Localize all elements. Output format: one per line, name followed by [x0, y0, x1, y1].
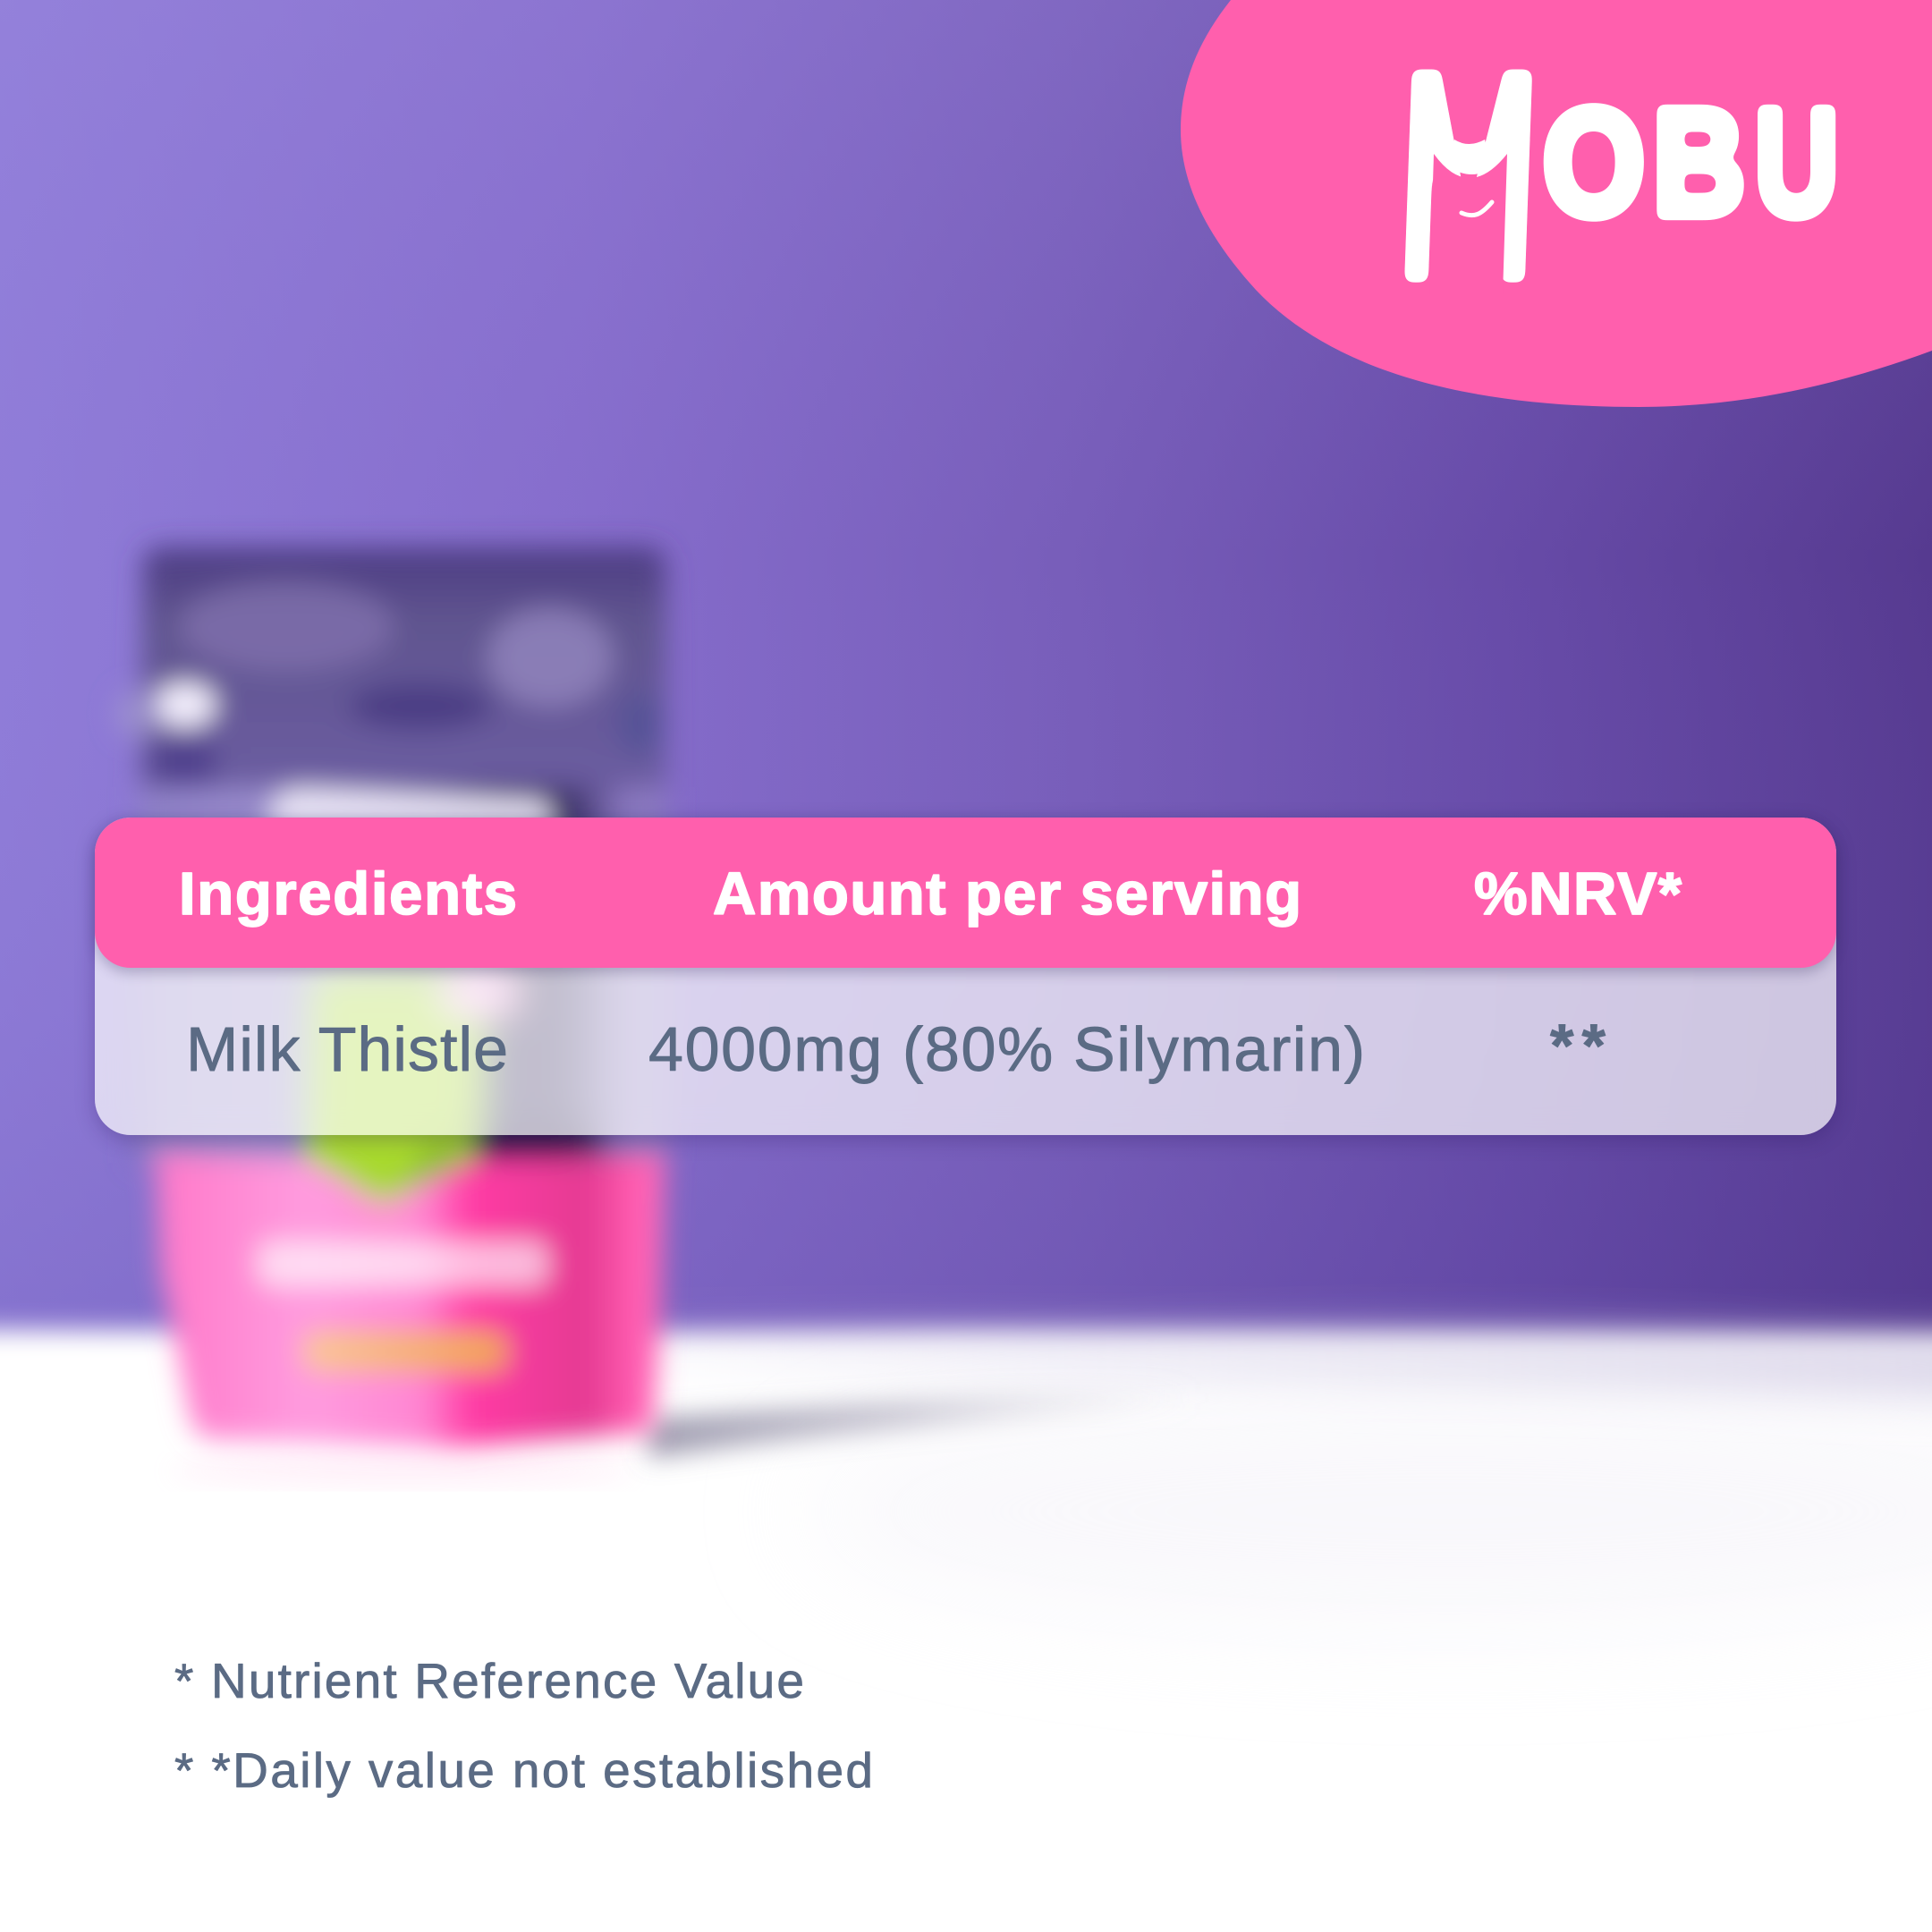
label band [258, 1241, 548, 1286]
header text [179, 860, 1682, 928]
column heading: ingredients: Ingredients [179, 860, 517, 928]
amount: 4000mg (80% Silymarin) [648, 1014, 1365, 1084]
panel: ingredients table [85, 812, 1843, 1150]
NRV value: ** [1550, 1012, 1606, 1080]
reflection below product [170, 1459, 635, 1484]
table header bar [95, 818, 1836, 968]
upper pouch [134, 547, 667, 1163]
logo: MOBU: U [1755, 77, 1838, 247]
orange tag [302, 1331, 508, 1372]
table body row: frosted glass [95, 818, 1836, 1135]
logo: MOBU: M [1394, 18, 1543, 335]
ingredient name: Milk Thistle [186, 1014, 508, 1084]
footnote: nutrient reference value: * Nutrient Reference Value [174, 1653, 804, 1708]
floor [0, 1329, 1932, 1932]
logo: centre join of the M [1447, 140, 1492, 174]
blurred product [115, 547, 667, 1447]
logo: MOBU: O [1543, 77, 1645, 247]
row text [186, 1012, 1606, 1084]
floor haze near horizon [501, 1333, 1932, 1397]
logo: MOBU: B [1653, 78, 1745, 248]
logo: MOBU [1394, 18, 1838, 335]
pink lower pouch [156, 1154, 665, 1447]
footnote: daily value: * *Daily value not established [174, 1742, 873, 1798]
logo: inner cut of the M [1429, 154, 1507, 295]
logo smile [1462, 202, 1492, 216]
floor tint [805, 1395, 1932, 1628]
column heading: NRV: %NRV* [1474, 860, 1682, 928]
floor shadow [648, 1388, 1199, 1458]
blob [1181, 0, 1932, 407]
wall [0, 0, 1932, 1395]
column heading: amount: Amount per serving [713, 860, 1301, 928]
leaf behind the band [304, 970, 483, 1203]
